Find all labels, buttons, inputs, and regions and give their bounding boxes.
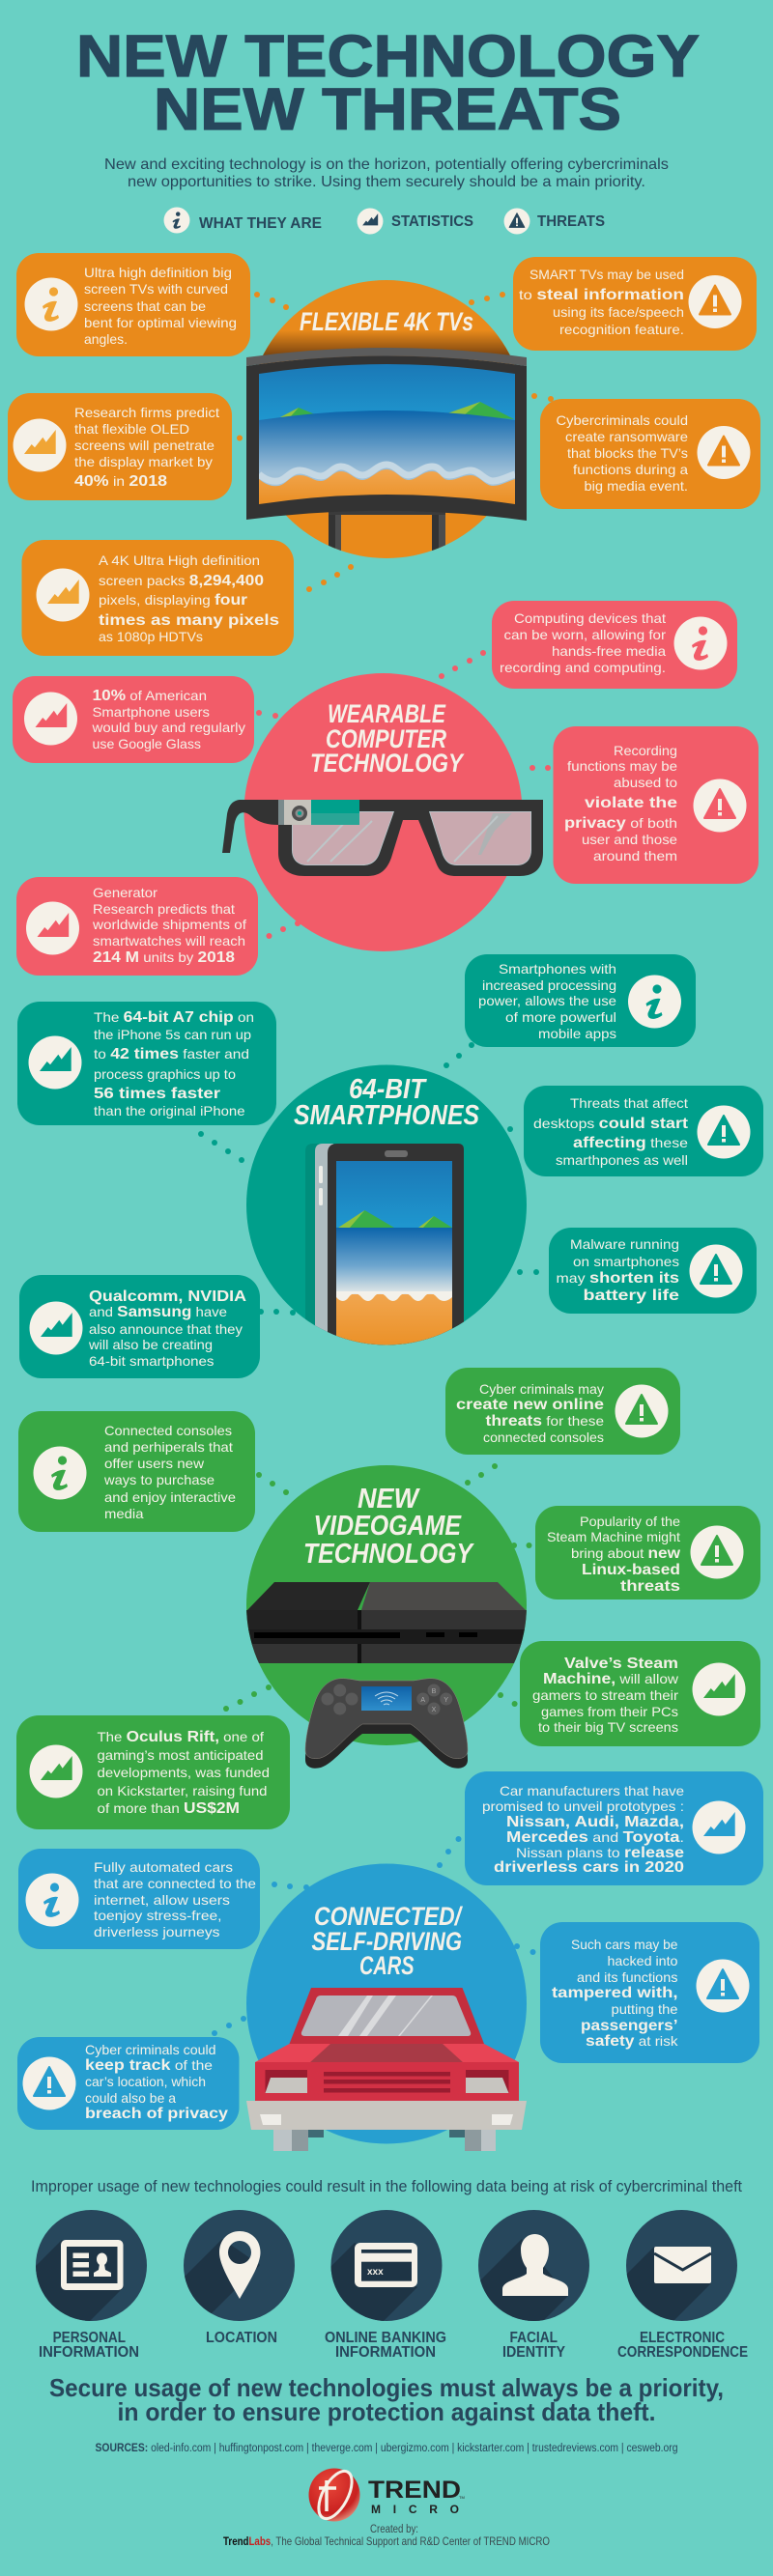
section circle <box>243 673 522 951</box>
panel: oculus rift statistic: developments, was funded <box>97 1765 270 1780</box>
icon: info <box>628 976 681 1028</box>
icon: online banking <box>330 2210 443 2321</box>
panel: oculus rift statistic <box>16 1715 290 1829</box>
panel: threat privacy <box>553 726 759 884</box>
panel: threat desktops: smarthpones as well <box>556 1152 688 1168</box>
section circle <box>246 1864 527 2144</box>
intro text: New and exciting technology is on the horizon, potentially offering cybercriminals <box>104 156 669 173</box>
data labels: FACIAL <box>510 2330 558 2346</box>
panel: car makers statistic: Mercedes and Toyota . <box>506 1829 684 1846</box>
icon: warning <box>694 778 746 833</box>
panel: threat tampering: safety at risk <box>586 2033 679 2050</box>
panel: car makers statistic: Nissan, Audi, Mazda, <box>506 1814 684 1830</box>
heading <box>294 1074 480 1131</box>
panel: threat ransomware: Cybercriminals could <box>557 412 688 428</box>
icon: statistics <box>26 902 79 954</box>
data labels: CORRESPONDENCE <box>617 2344 748 2361</box>
data icons row <box>36 2210 737 2321</box>
connector dots <box>256 650 551 939</box>
phone illustration <box>305 1144 464 1362</box>
panel: threat tracking: could also be a <box>85 2090 176 2106</box>
credits <box>223 2524 550 2548</box>
panel: threat online threats: Cyber criminals may <box>479 1381 604 1397</box>
data labels: PERSONAL <box>53 2330 126 2346</box>
legend: WHAT THEY ARE <box>199 215 322 232</box>
panel: vendors statistic: will also be creating <box>88 1337 213 1352</box>
panel: threat battery <box>549 1228 757 1314</box>
panel: 4K pixels statistic: screen packs 8,294,400 <box>99 573 264 589</box>
heading: TECHNOLOGY <box>310 749 465 778</box>
panel: threat online threats: create new online <box>456 1397 604 1413</box>
panel: smartwatch statistic <box>16 877 258 976</box>
panel: A7 chip statistic: The 64-bit A7 chip on <box>94 1009 254 1026</box>
panel: threat ransomware: that blocks the TV’s <box>567 445 688 461</box>
connector dots <box>212 1836 535 2036</box>
panel: threat battery: may shorten its <box>557 1270 679 1287</box>
section circle <box>246 1064 527 1345</box>
panel: threat tampering <box>540 1922 759 2063</box>
panel: smartwatch statistic: smartwatches will reach <box>93 933 245 948</box>
panel: threat tracking: car’s location, which <box>85 2074 206 2089</box>
icon: online banking: xxx <box>367 2267 384 2278</box>
panel: 4K pixels statistic: as 1080p HDTVs <box>99 629 203 644</box>
sources: SOURCES: oled-info.com | huffingtonpost.com | theverge.com | ubergizmo.com | kickstarter.com | trustedreviews.com | cesweb.org <box>95 2443 678 2454</box>
panel: steam machine statistic: to their big TV screens <box>538 1719 678 1735</box>
heading: NEW <box>358 1484 420 1514</box>
panel: OLED statistic: the display market by <box>74 454 213 469</box>
icon: warning <box>688 275 742 328</box>
panel: vendors statistic: and Samsung have <box>89 1304 227 1320</box>
panel: threat privacy: around them <box>593 848 677 863</box>
panel: 4K pixels statistic: A 4K Ultra High definition <box>99 552 260 568</box>
panel: smartwatch statistic: worldwide shipments of <box>92 917 246 932</box>
panel: what they are: Smartphones with <box>499 961 616 977</box>
gamepad illustration <box>305 1679 468 1769</box>
panel: A7 chip statistic: to 42 times faster and <box>94 1046 249 1062</box>
data labels: ONLINE BANKING <box>325 2330 446 2346</box>
panel: steam machine statistic: Valve’s Steam <box>564 1656 678 1672</box>
panel: threat desktops: Threats that affect <box>570 1095 688 1111</box>
panel: car makers statistic: driverless cars in 2020 <box>494 1859 684 1876</box>
gamepad illustration: Y <box>444 1697 448 1704</box>
logo: Trend Micro: TM <box>459 2495 465 2500</box>
panel: what they are: Computing devices that <box>514 610 666 626</box>
panel: what they are <box>465 954 696 1047</box>
panel: 4K pixels statistic <box>21 540 294 656</box>
panel: threat linux: threats <box>620 1578 680 1595</box>
icon: statistics <box>29 1035 81 1090</box>
credits: TrendLabs, The Global Technical Support and R&D Center of TREND MICRO <box>223 2534 550 2548</box>
heading <box>310 699 465 778</box>
panel: google glass statistic <box>13 676 254 763</box>
legend <box>164 208 605 234</box>
panel: threat desktops <box>524 1086 763 1176</box>
TV illustration <box>246 348 527 565</box>
panel: what they are: hands-free media <box>552 643 666 659</box>
panel: what they are: power, allows the use <box>478 993 616 1008</box>
connector dots <box>223 1463 531 1712</box>
panel: threat tracking: Cyber criminals could <box>85 2042 216 2057</box>
heading: FLEXIBLE 4K TVs <box>300 307 473 336</box>
icon: warning <box>690 1244 742 1298</box>
panel: what they are: that are connected to the <box>94 1876 256 1891</box>
panel: car makers statistic: Car manufacturers that have <box>500 1783 684 1798</box>
icon: statistics <box>24 692 77 746</box>
panel: what they are <box>18 1849 260 1949</box>
heading: WEARABLE <box>328 699 446 728</box>
panel: OLED statistic <box>8 393 232 500</box>
panel: smartwatch statistic: Generator <box>93 885 157 900</box>
panel: A7 chip statistic: than the original iPhone <box>94 1103 245 1118</box>
panel: vendors statistic: Qualcomm, NVIDIA <box>89 1288 246 1305</box>
panel: steam machine statistic: games from their PCs <box>541 1704 678 1719</box>
title <box>76 23 700 142</box>
icon: electronic correspondence <box>626 2210 737 2321</box>
icon: statistics <box>692 1800 746 1854</box>
panel: threat privacy: violate the <box>585 795 677 811</box>
section circle <box>246 1465 527 1745</box>
icon: info <box>674 616 727 670</box>
panel: threat tampering: passengers’ <box>581 2018 678 2034</box>
section: 64-bit smartphones <box>17 954 763 1378</box>
panel: threat ransomware: create ransomware <box>565 429 688 444</box>
heading: COMPUTER <box>326 724 446 753</box>
panel: threat linux: Linux-based <box>582 1562 680 1578</box>
panel: threat linux <box>535 1506 760 1599</box>
credits: Created by: <box>370 2524 418 2535</box>
panel: threat battery: on smartphones <box>573 1254 679 1269</box>
panel: threat steal information: recognition feature. <box>559 322 684 337</box>
icon: info <box>25 278 77 330</box>
panel: threat privacy: Recording <box>614 743 677 758</box>
icon: statistics <box>29 1302 83 1354</box>
console illustration <box>242 1582 531 1663</box>
data labels: ELECTRONIC <box>640 2330 725 2346</box>
panel: google glass statistic: 10% of American <box>93 688 207 704</box>
panel: threat tracking: keep track of the <box>85 2057 213 2074</box>
heading: TECHNOLOGY <box>303 1539 474 1570</box>
gamepad illustration: B <box>432 1688 437 1695</box>
panel: what they are: Connected consoles <box>104 1423 232 1438</box>
panel: what they are <box>492 601 737 689</box>
heading <box>311 1902 463 1980</box>
heading: SMARTPHONES <box>294 1100 480 1131</box>
section: connected self-driving cars <box>17 1771 763 2151</box>
icon: warning <box>690 1526 744 1578</box>
panel: smartwatch statistic: 214 M units by 2018 <box>93 949 235 966</box>
title: NEW TECHNOLOGY <box>76 23 700 89</box>
panel: threat ransomware: big media event. <box>584 478 688 494</box>
intro text: new opportunities to strike. Using them securely should be a main priority. <box>128 174 645 190</box>
title: NEW THREATS <box>154 76 621 142</box>
panel: what they are <box>16 253 250 356</box>
icon: warning <box>23 2057 75 2109</box>
panel: car makers statistic: promised to unveil prototypes : <box>482 1798 684 1814</box>
panel: OLED statistic: 40% in 2018 <box>74 473 167 490</box>
panel: threat tampering: tampered with, <box>552 1985 678 2001</box>
panel: vendors statistic: 64-bit smartphones <box>89 1353 215 1369</box>
data labels <box>39 2330 748 2361</box>
heading: CARS <box>359 1951 414 1980</box>
panel: threat battery: battery life <box>584 1288 679 1304</box>
gamepad illustration: A <box>420 1697 425 1704</box>
panel: threat steal information: using its face/speech <box>553 304 684 320</box>
panel: what they are: of more powerful <box>505 1009 616 1025</box>
data at risk intro: Improper usage of new technologies could result in the following data being at risk of cybercriminal theft <box>31 2178 742 2195</box>
panel: threat online threats: threats for these <box>485 1413 604 1430</box>
data labels: LOCATION <box>206 2330 277 2346</box>
panel: OLED statistic: that flexible OLED <box>74 421 189 437</box>
panel: steam machine statistic: Machine, will allow <box>543 1671 679 1687</box>
closing statement <box>49 2373 724 2426</box>
icon: statistics <box>14 419 66 471</box>
panel: threat ransomware <box>540 399 760 509</box>
panel: what they are <box>18 1411 255 1532</box>
panel: threat desktops: desktops could start <box>533 1116 689 1132</box>
panel: 4K pixels statistic: pixels, displaying four <box>99 592 247 609</box>
panel: threat ransomware: functions during a <box>573 462 688 477</box>
panel: what they are: and enjoy interactive <box>104 1489 236 1505</box>
heading: SELF-DRIVING <box>311 1927 462 1956</box>
panel: what they are: recording and computing. <box>500 660 666 675</box>
connector dots <box>198 1042 539 1316</box>
panel: threat steal information <box>513 257 757 351</box>
closing statement: in order to ensure protection against data theft. <box>118 2397 655 2426</box>
heading: CONNECTED/ <box>314 1902 463 1931</box>
panel: what they are: increased processing <box>482 977 616 993</box>
panel: threat linux: Popularity of the <box>580 1514 680 1529</box>
panel: threat online threats: connected consoles <box>483 1430 604 1445</box>
section circle <box>247 280 526 558</box>
icon: warning <box>698 426 750 479</box>
panel: steam machine statistic <box>520 1641 760 1746</box>
panel: threat tracking: breach of privacy <box>85 2106 228 2122</box>
panel: car makers statistic: Nissan plans to release <box>516 1845 684 1861</box>
panel: threat privacy: functions may be <box>567 758 677 774</box>
heading <box>303 1484 474 1570</box>
icon: warning <box>696 1959 750 2013</box>
icon: warning <box>698 1105 750 1159</box>
icon: info <box>33 1447 87 1499</box>
panel: oculus rift statistic: The Oculus Rift, one of <box>97 1729 264 1745</box>
panel: threat privacy: abused to <box>614 775 677 790</box>
panel: what they are: mobile apps <box>538 1026 616 1041</box>
panel: what they are: screens that can be <box>84 298 206 314</box>
intro text <box>104 156 669 190</box>
panel: threat tampering: Such cars may be <box>571 1937 678 1952</box>
panel: vendors statistic <box>19 1275 260 1378</box>
logo: Trend Micro: MICRO <box>371 2503 459 2516</box>
panel: OLED statistic: screens will penetrate <box>74 438 215 453</box>
icon: personal information <box>36 2210 147 2321</box>
panel: what they are: angles. <box>84 331 128 347</box>
panel: car makers statistic <box>465 1771 763 1885</box>
data labels: IDENTITY <box>502 2344 565 2361</box>
panel: threat steal information: SMART TVs may be used <box>530 267 684 282</box>
circle shadow <box>263 330 510 359</box>
panel: threat privacy: privacy of both <box>564 815 677 832</box>
panel: threat battery: Malware running <box>570 1236 679 1252</box>
connector dots <box>237 292 554 592</box>
gamepad illustration: X <box>432 1707 437 1713</box>
legend: THREATS <box>537 213 605 230</box>
panel: what they are: can be worn, allowing for <box>504 627 666 642</box>
panel: steam machine statistic: gamers to stream their <box>532 1687 678 1703</box>
section: new videogame technology <box>16 1368 760 1829</box>
icon: statistics <box>692 1663 746 1715</box>
icon: info <box>25 1874 79 1926</box>
panel: threat desktops: affecting these <box>573 1135 688 1151</box>
logo: Trend Micro <box>309 2466 465 2524</box>
closing statement: Secure usage of new technologies must always be a priority, <box>49 2373 724 2402</box>
heading: 64-BIT <box>349 1074 427 1105</box>
panel: vendors statistic: also announce that they <box>89 1321 243 1337</box>
panel: smartwatch statistic: Research predicts that <box>93 901 235 917</box>
panel: threat tampering: putting the <box>611 2001 678 2017</box>
panel: google glass statistic: use Google Glass <box>93 736 201 751</box>
panel: what they are: bent for optimal viewing <box>84 315 237 330</box>
panel: threat online threats <box>445 1368 680 1455</box>
panel: what they are: internet, allow users <box>94 1892 230 1908</box>
panel: A7 chip statistic <box>17 1002 276 1125</box>
panel: google glass statistic: Smartphone users <box>93 704 210 720</box>
panel: what they are: Fully automated cars <box>94 1859 233 1875</box>
panel: google glass statistic: would buy and regularly <box>91 720 245 735</box>
panel: threat linux: Steam Machine might <box>547 1529 680 1544</box>
panel: what they are: screen TVs with curved <box>84 281 228 297</box>
panel: 4K pixels statistic: times as many pixels <box>99 612 279 629</box>
section: wearable computer technology <box>13 601 759 976</box>
panel: A7 chip statistic: the iPhone 5s can run up <box>94 1027 251 1042</box>
panel: what they are: media <box>104 1506 144 1521</box>
panel: A7 chip statistic: process graphics up to <box>94 1066 236 1082</box>
legend: STATISTICS <box>391 213 473 230</box>
panel: A7 chip statistic: 56 times faster <box>94 1086 220 1102</box>
panel: threat linux: bring about new <box>571 1545 681 1562</box>
icon: location <box>184 2210 295 2321</box>
panel: what they are: ways to purchase <box>103 1472 215 1487</box>
car illustration <box>246 1988 527 2151</box>
panel: threat steal information: to steal information <box>519 287 684 303</box>
panel: threat tampering: hacked into <box>607 1953 678 1968</box>
panel: what they are: and perhiperals that <box>104 1439 233 1455</box>
panel: oculus rift statistic: gaming’s most anticipated <box>97 1747 263 1763</box>
panel: what they are: driverless journeys <box>94 1924 220 1939</box>
icon: statistics <box>37 568 89 622</box>
panel: OLED statistic: Research firms predict <box>74 405 219 420</box>
panel: oculus rift statistic: of more than US$2M <box>97 1800 240 1817</box>
heading: VIDEOGAME <box>313 1511 462 1542</box>
panel: threat privacy: user and those <box>582 832 677 847</box>
panel: threat tampering: and its functions <box>577 1969 678 1985</box>
panel: threat tracking <box>17 2037 240 2130</box>
data labels: INFORMATION <box>335 2344 436 2361</box>
icon: facial identity <box>478 2210 589 2321</box>
section: flexible 4K TVs <box>8 253 760 656</box>
icon: statistics <box>29 1744 83 1798</box>
panel: what they are: offer users new <box>104 1456 205 1471</box>
panel: oculus rift statistic: on Kickstarter, raising fund <box>97 1783 267 1798</box>
logo: Trend Micro: TREND <box>368 2477 461 2504</box>
icon: warning <box>615 1385 669 1437</box>
glasses illustration <box>222 800 543 876</box>
data labels: INFORMATION <box>39 2344 139 2361</box>
panel: what they are: Ultra high definition big <box>84 265 232 280</box>
panel: what they are: toenjoy stress-free, <box>94 1908 222 1923</box>
